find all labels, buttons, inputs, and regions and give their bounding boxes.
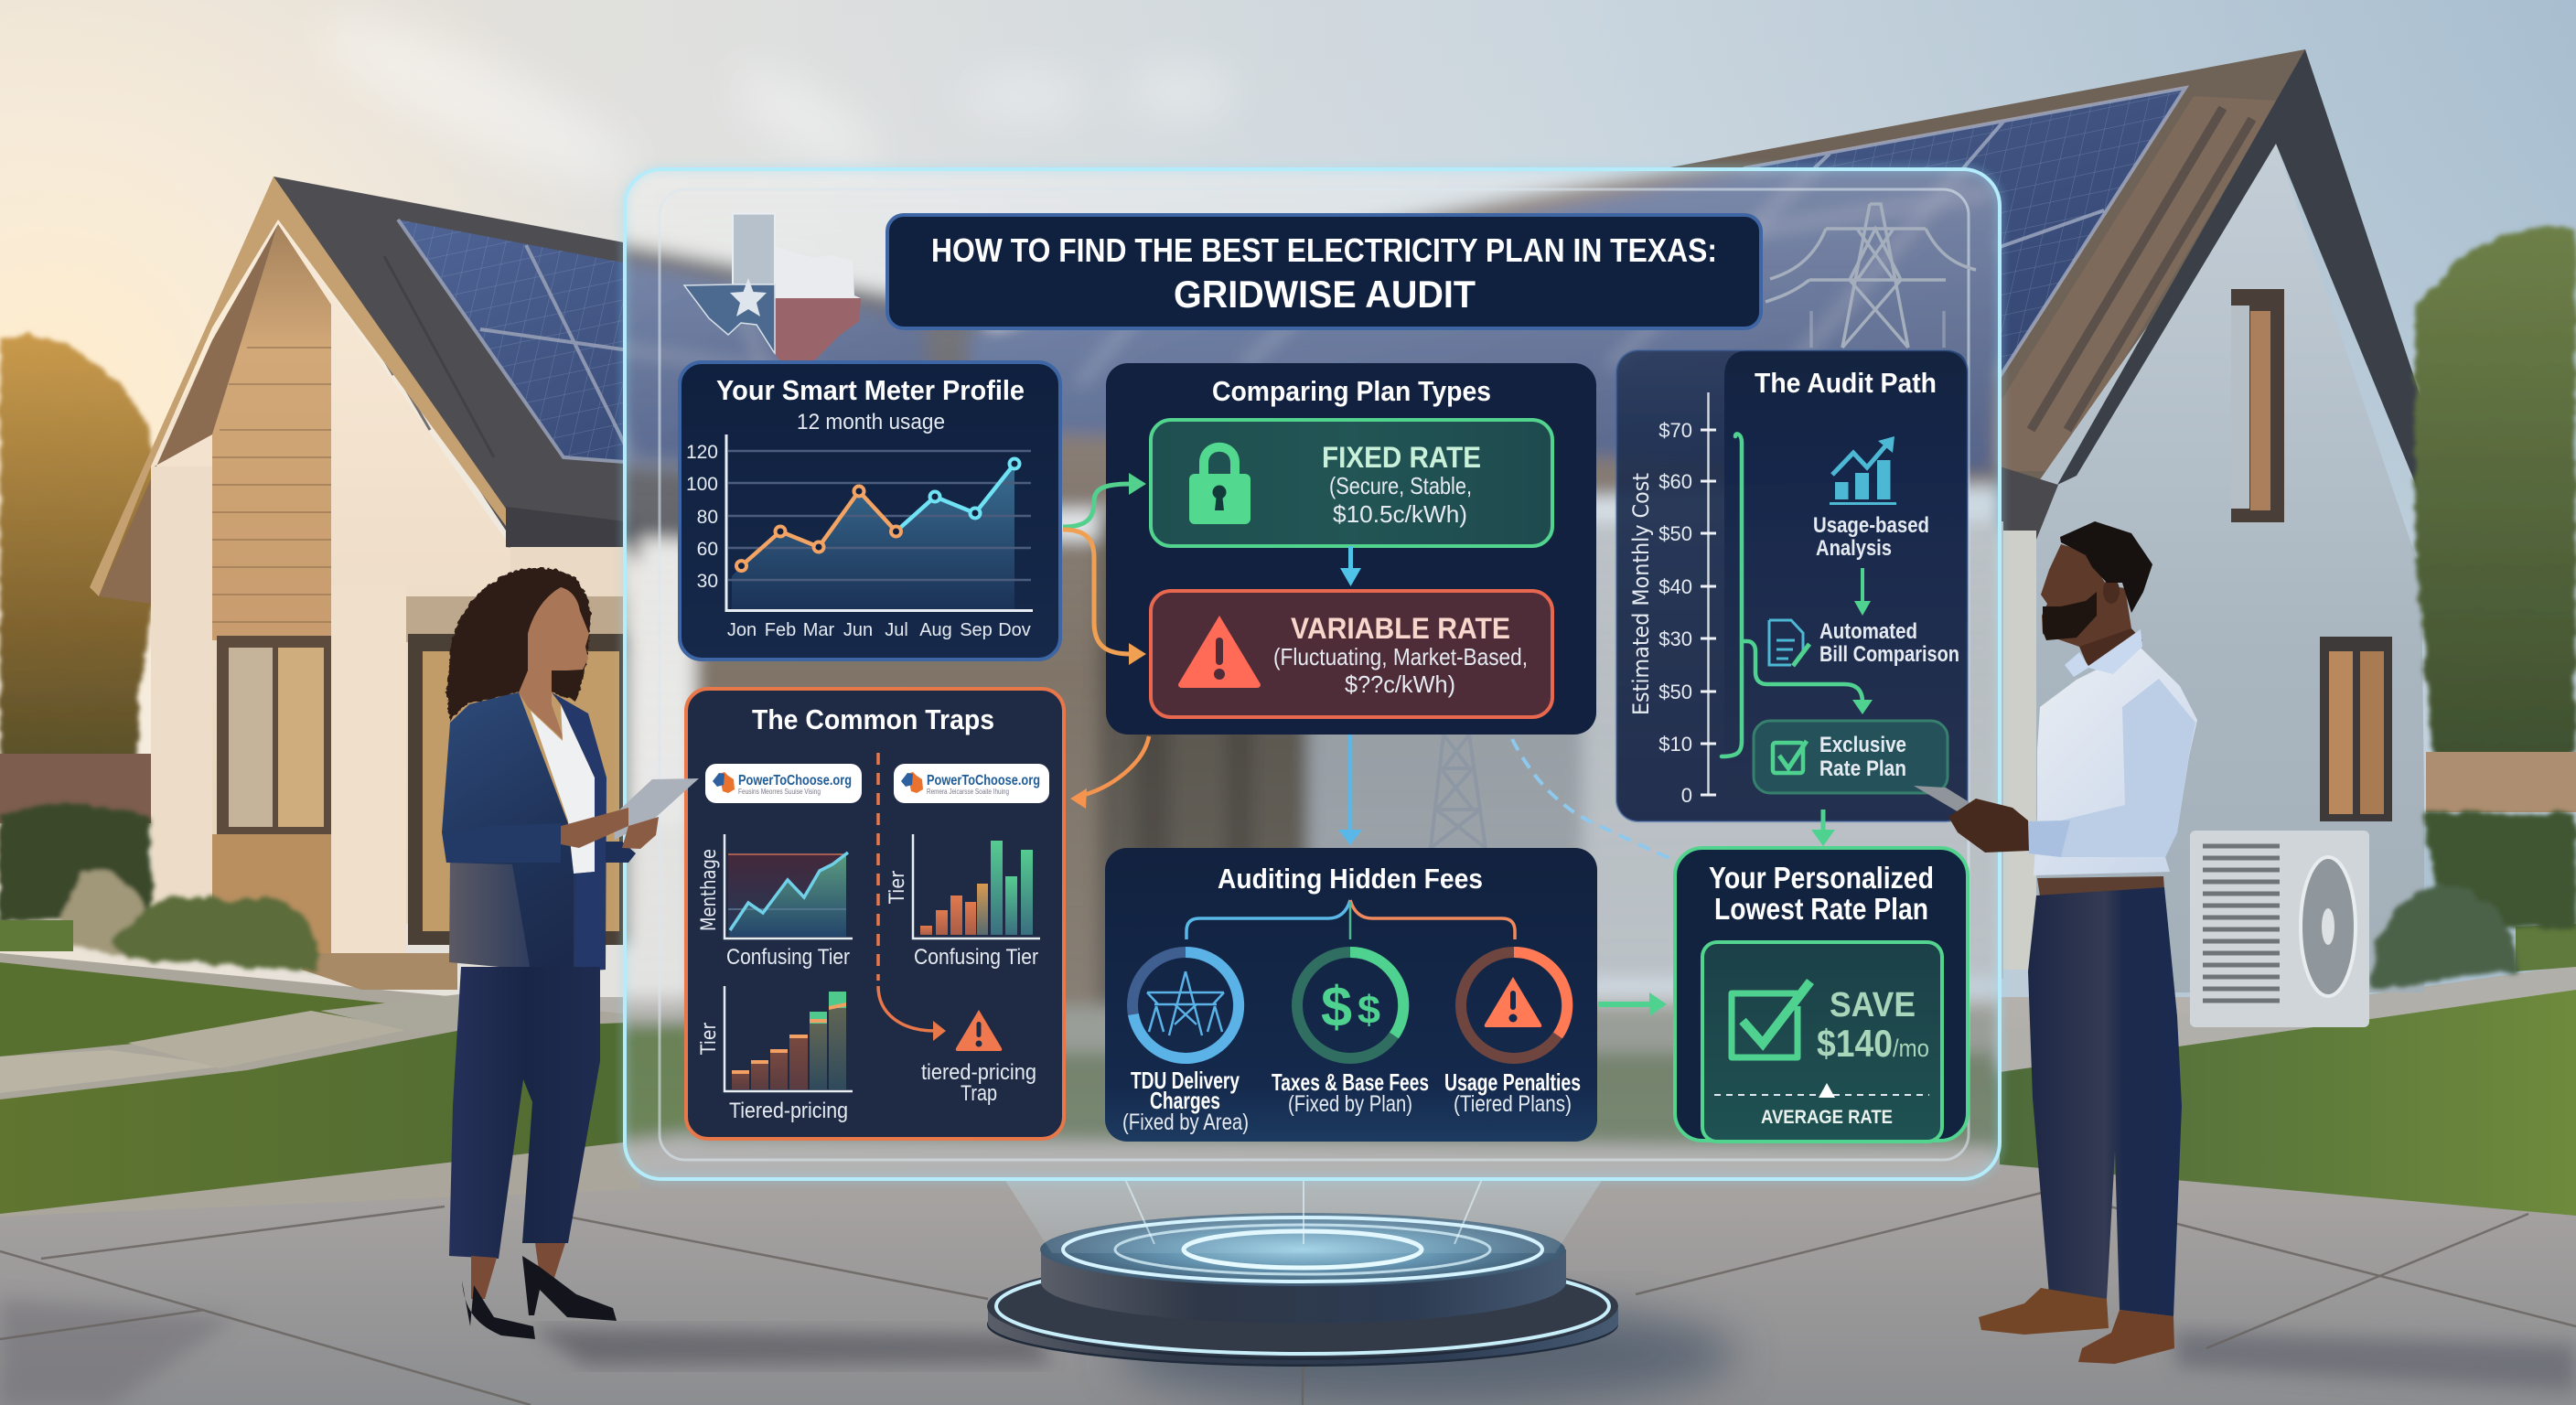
- glass display panel: [469, 161, 2353, 1335]
- card: variable rate: [1151, 591, 1552, 717]
- panel: the common traps: [686, 689, 1064, 1139]
- panel: the audit path: Usage-based: [1813, 513, 1929, 538]
- savings card: /mo: [1893, 1035, 1929, 1062]
- heading: smart meter: Your Smart Meter Profile: [716, 374, 1025, 406]
- item: taxes and base fees: Taxes & Base Fees: [1272, 1068, 1429, 1096]
- chart: confusing tier line: Menthage: [698, 849, 721, 931]
- icon: trap warning: [956, 1010, 1002, 1051]
- sleeve: [2028, 679, 2195, 857]
- item: taxes and base fees: [1272, 952, 1429, 1117]
- heels: [462, 1281, 535, 1339]
- item: tdu delivery charges: TDU Delivery: [1131, 1067, 1240, 1094]
- cost axis: $60: [1658, 470, 1692, 493]
- chart: confusing tier bars: Tier: [886, 870, 909, 905]
- heading: personalized: Your Personalized: [1709, 861, 1934, 895]
- divider and trap arrow: [878, 753, 946, 1041]
- card: fixed rate: (Secure, Stable,: [1329, 472, 1472, 499]
- item: tdu delivery charges: [1122, 952, 1249, 1135]
- line chart: monthly usage: 120: [686, 442, 718, 463]
- arrow: meter to variable rate: [1063, 530, 1146, 665]
- trousers: [449, 967, 600, 1259]
- panel: your smart meter profile: [680, 362, 1060, 660]
- line chart: monthly usage: Feb: [765, 620, 796, 640]
- arrow: hidden fees to personalized plan: [1598, 992, 1667, 1016]
- heading: hidden fees: Auditing Hidden Fees: [1218, 863, 1483, 895]
- logo: powertochoose left: [705, 764, 862, 803]
- savings card: SAVE: [1830, 986, 1916, 1024]
- logo: powertochoose right: PowerToChoose.org: [927, 773, 1040, 788]
- line chart: monthly usage: [686, 434, 1033, 640]
- chart: confusing tier bars: Confusing Tier: [914, 945, 1038, 970]
- hair: [2060, 521, 2152, 613]
- title banner: [887, 215, 1761, 328]
- icon: dollar signs: [1321, 976, 1380, 1039]
- line chart: monthly usage: Dov: [998, 620, 1031, 640]
- item: usage penalties: (Tiered Plans): [1454, 1091, 1572, 1117]
- person: woman with tablet: [442, 567, 699, 1339]
- shirt: [2034, 648, 2197, 875]
- chart: tiered pricing bars: Tier: [698, 1022, 721, 1056]
- card: variable rate: VARIABLE RATE: [1291, 612, 1510, 645]
- green audit path line: [1722, 434, 1862, 756]
- cost axis: $50: [1658, 522, 1692, 545]
- heading: comparing: Comparing Plan Types: [1212, 375, 1491, 407]
- cost axis: $30: [1658, 627, 1692, 650]
- savings card: [1702, 942, 1942, 1142]
- panel: the audit path: Automated: [1819, 619, 1917, 644]
- line chart: monthly usage: Jon: [727, 620, 757, 640]
- card: exclusive rate plan: Rate Plan: [1819, 756, 1906, 781]
- item: tdu delivery charges: Charges: [1150, 1087, 1220, 1114]
- heading: traps: The Common Traps: [752, 703, 994, 735]
- icon: padlock: [1189, 447, 1250, 524]
- faint transmission tower behind title: [1766, 204, 1976, 348]
- icon: average marker: [1819, 1083, 1835, 1098]
- line chart: monthly usage: Mar: [803, 620, 835, 640]
- card: fixed rate: $10.5c/kWh): [1333, 500, 1467, 528]
- arrow: fixed to variable: [1340, 546, 1361, 586]
- hair: [446, 567, 591, 720]
- line chart: monthly usage: Sep: [960, 620, 993, 640]
- person: man with tablet: [1914, 521, 2197, 1364]
- icon: dollar signs: $: [1358, 988, 1380, 1033]
- arrow: audit path to personalized plan: [1811, 810, 1835, 846]
- line chart: monthly usage: Aug: [919, 620, 952, 640]
- savings card: $140: [1817, 1022, 1893, 1065]
- cost axis: Estimated Monthly Cost: [1628, 473, 1654, 715]
- face: [2041, 544, 2131, 647]
- panel: the audit path: Analysis: [1816, 536, 1892, 561]
- title banner: HOW TO FIND THE BEST ELECTRICITY PLAN IN TEXAS:: [931, 231, 1717, 269]
- title banner: GRIDWISE AUDIT: [1174, 273, 1476, 316]
- chart: tiered pricing bars: Tiered-pricing: [729, 1099, 848, 1123]
- icon: document: [1769, 620, 1809, 666]
- panel: auditing hidden fees: [1105, 848, 1597, 1142]
- icon: warning triangle: [1178, 616, 1261, 688]
- tablet: [1914, 786, 1994, 819]
- icon: large checkbox: [1732, 981, 1810, 1057]
- panel: your personalized lowest rate plan: [1675, 848, 1968, 1142]
- dashed link: compare to personalized plan: [1512, 739, 1669, 858]
- texas flag map: [684, 214, 861, 360]
- forearm and cuff: [443, 823, 561, 863]
- line chart: monthly usage: 60: [697, 539, 718, 560]
- face and neck: [519, 587, 589, 741]
- panel: comparing plan types: [1106, 363, 1596, 735]
- light beam from projector: [970, 1125, 1637, 1253]
- white top: [531, 704, 595, 874]
- icon: dollar signs: $: [1321, 976, 1352, 1039]
- line chart: monthly usage: Jun: [843, 620, 873, 640]
- arrow: compare to hidden fees: [1338, 735, 1362, 845]
- cost axis: $10: [1658, 733, 1692, 756]
- logo: powertochoose left: Feusins Meorres Suuise Vising: [738, 788, 821, 796]
- line chart: monthly usage: 30: [697, 571, 718, 592]
- card: exclusive rate plan: [1754, 721, 1948, 793]
- belt: [2037, 876, 2164, 896]
- cost axis: $50: [1658, 681, 1692, 703]
- jacket: [442, 692, 574, 971]
- cuff: [2028, 820, 2070, 857]
- line chart: monthly usage: 80: [697, 507, 718, 528]
- card: variable rate: $??c/kWh): [1345, 670, 1455, 698]
- item: usage penalties: Usage Penalties: [1444, 1068, 1581, 1096]
- icon: growth chart: [1830, 436, 1896, 505]
- hands: [1948, 799, 2029, 853]
- bracket connectors: [1186, 900, 1515, 939]
- logo: powertochoose left: PowerToChoose.org: [738, 773, 852, 788]
- label: tiered pricing trap: tiered-pricing: [921, 1060, 1036, 1085]
- card: exclusive rate plan: Exclusive: [1819, 733, 1906, 757]
- label: tiered pricing trap: [921, 1060, 1036, 1106]
- ankles: [471, 1243, 565, 1299]
- chart: confusing tier line: Confusing Tier: [726, 945, 850, 970]
- label: tiered pricing trap: Trap: [961, 1081, 997, 1106]
- card: fixed rate: FIXED RATE: [1322, 441, 1481, 474]
- line chart: monthly usage: 100: [686, 474, 718, 495]
- panel: the audit path: [1616, 350, 1968, 821]
- cost axis: $70: [1658, 419, 1692, 442]
- lower jacket: [449, 860, 606, 971]
- line chart: monthly usage: Jul: [885, 620, 908, 640]
- arrow: meter to fixed rate: [1063, 473, 1146, 527]
- heading: audit path: The Audit Path: [1755, 367, 1937, 399]
- tablet: [613, 778, 699, 840]
- collar: [2065, 629, 2142, 677]
- chart: confusing tier bars: [886, 834, 1040, 970]
- savings card: AVERAGE RATE: [1761, 1107, 1893, 1128]
- icon: warning: [1485, 977, 1541, 1027]
- item: usage penalties: [1444, 952, 1581, 1117]
- hands: [561, 808, 659, 849]
- arrow: compare to traps: [1070, 736, 1149, 809]
- subheading: usage: 12 month usage: [797, 410, 945, 434]
- arrow: analysis to comparison: [1854, 568, 1871, 616]
- card: fixed rate: [1151, 420, 1552, 546]
- hologram projector base: [987, 1213, 1618, 1367]
- trousers: [2028, 887, 2182, 1316]
- neck: [2077, 628, 2142, 668]
- cost axis: 0: [1681, 784, 1692, 807]
- card: variable rate: (Fluctuating, Market-Based,: [1273, 643, 1528, 670]
- cost axis: $40: [1658, 575, 1692, 598]
- item: taxes and base fees: (Fixed by Plan): [1288, 1091, 1412, 1117]
- icon: lone star: [730, 278, 767, 316]
- logo: powertochoose right: Remera Jeicarsse Soaite Ihuing: [927, 788, 1009, 796]
- shoes: [1979, 1288, 2109, 1335]
- air conditioner unit: [2190, 831, 2369, 1027]
- logo: powertochoose right: [894, 764, 1049, 803]
- beard: [2043, 592, 2097, 640]
- chart: confusing tier line: [698, 834, 853, 970]
- chart: tiered pricing bars: [698, 986, 853, 1123]
- heading: lowest rate: Lowest Rate Plan: [1714, 892, 1928, 926]
- faint transmission tower behind centre: [1431, 735, 1486, 848]
- icon: pylon: [1147, 971, 1224, 1035]
- ear: [2103, 578, 2120, 604]
- panel: the audit path: Bill Comparison: [1819, 642, 1959, 667]
- item: tdu delivery charges: (Fixed by Area): [1122, 1110, 1249, 1135]
- cost axis: [1628, 392, 1716, 807]
